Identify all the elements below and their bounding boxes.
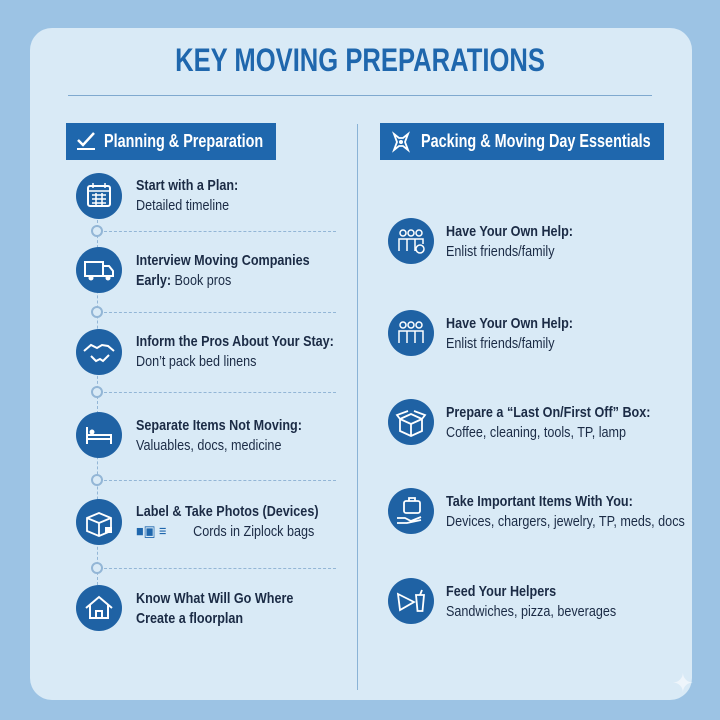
item: help 2: Have Your Own Help: (446, 315, 573, 332)
icon: handshake (76, 329, 122, 375)
connectors (91, 225, 103, 237)
item: interview (76, 247, 310, 293)
item: help 1: Have Your Own Help: (446, 223, 573, 240)
icon: truck (76, 247, 122, 293)
item: help 1 (388, 218, 573, 264)
icon: bed (76, 412, 122, 458)
vertical timeline line (97, 220, 98, 590)
item: separate: Separate Items Not Moving: (136, 417, 302, 434)
item: last on box: Coffee, cleaning, tools, TP, lamp (446, 424, 626, 441)
item: know where: Know What Will Go Where (136, 590, 293, 607)
item: start with a plan: Start with a Plan: (136, 177, 238, 194)
item: separate: Valuables, docs, medicine (136, 437, 281, 454)
item: label: Cords in Ziplock bags (193, 523, 314, 540)
item: last on box (388, 399, 650, 445)
item: label (76, 499, 319, 545)
item: help 2 (388, 310, 573, 356)
item: help 2: Enlist friends/family (446, 335, 555, 352)
item: inform (76, 329, 334, 375)
item: feed helpers (388, 578, 616, 624)
item: label: Label & Take Photos (Devices) (136, 503, 319, 520)
icon: people (388, 218, 434, 264)
icon: box (76, 499, 122, 545)
icon: people (388, 310, 434, 356)
item: know where (76, 585, 293, 631)
item: important items: Take Important Items With You: (446, 493, 633, 510)
icon: open box (388, 399, 434, 445)
item: feed helpers: Feed Your Helpers (446, 583, 556, 600)
item: start with a plan: Detailed timeline (136, 197, 229, 214)
header: planning: Planning & Preparation (104, 131, 263, 151)
item: inform: Don’t pack bed linens (136, 353, 256, 370)
icon: sparkle: ✦ (672, 668, 694, 698)
item: feed helpers: Sandwiches, pizza, beverages (446, 603, 616, 620)
icon: calendar (76, 173, 122, 219)
item: start with a plan (76, 173, 238, 219)
header: packing: Packing & Moving Day Essentials (421, 131, 651, 151)
item: interview: Interview Moving Companies (136, 252, 310, 269)
title: KEY MOVING PREPARATIONS (175, 42, 545, 78)
item: separate (76, 412, 302, 458)
item: interview: Early: Book pros (136, 272, 231, 289)
item: important items (388, 488, 685, 534)
item: inform: Inform the Pros About Your Stay: (136, 333, 334, 350)
item: help 1: Enlist friends/family (446, 243, 555, 260)
icon: hand with bag (388, 488, 434, 534)
icon: pizza & drink (388, 578, 434, 624)
icon: house (76, 585, 122, 631)
item: know where: Create a floorplan (136, 610, 243, 627)
item: last on box: Prepare a “Last On/First Off” Box: (446, 404, 650, 421)
header: packing (380, 123, 664, 160)
item: important items: Devices, chargers, jewelry, TP, meds, docs (446, 513, 685, 530)
header: planning (66, 123, 276, 160)
item: label: ■▣ ≡ (136, 523, 166, 540)
